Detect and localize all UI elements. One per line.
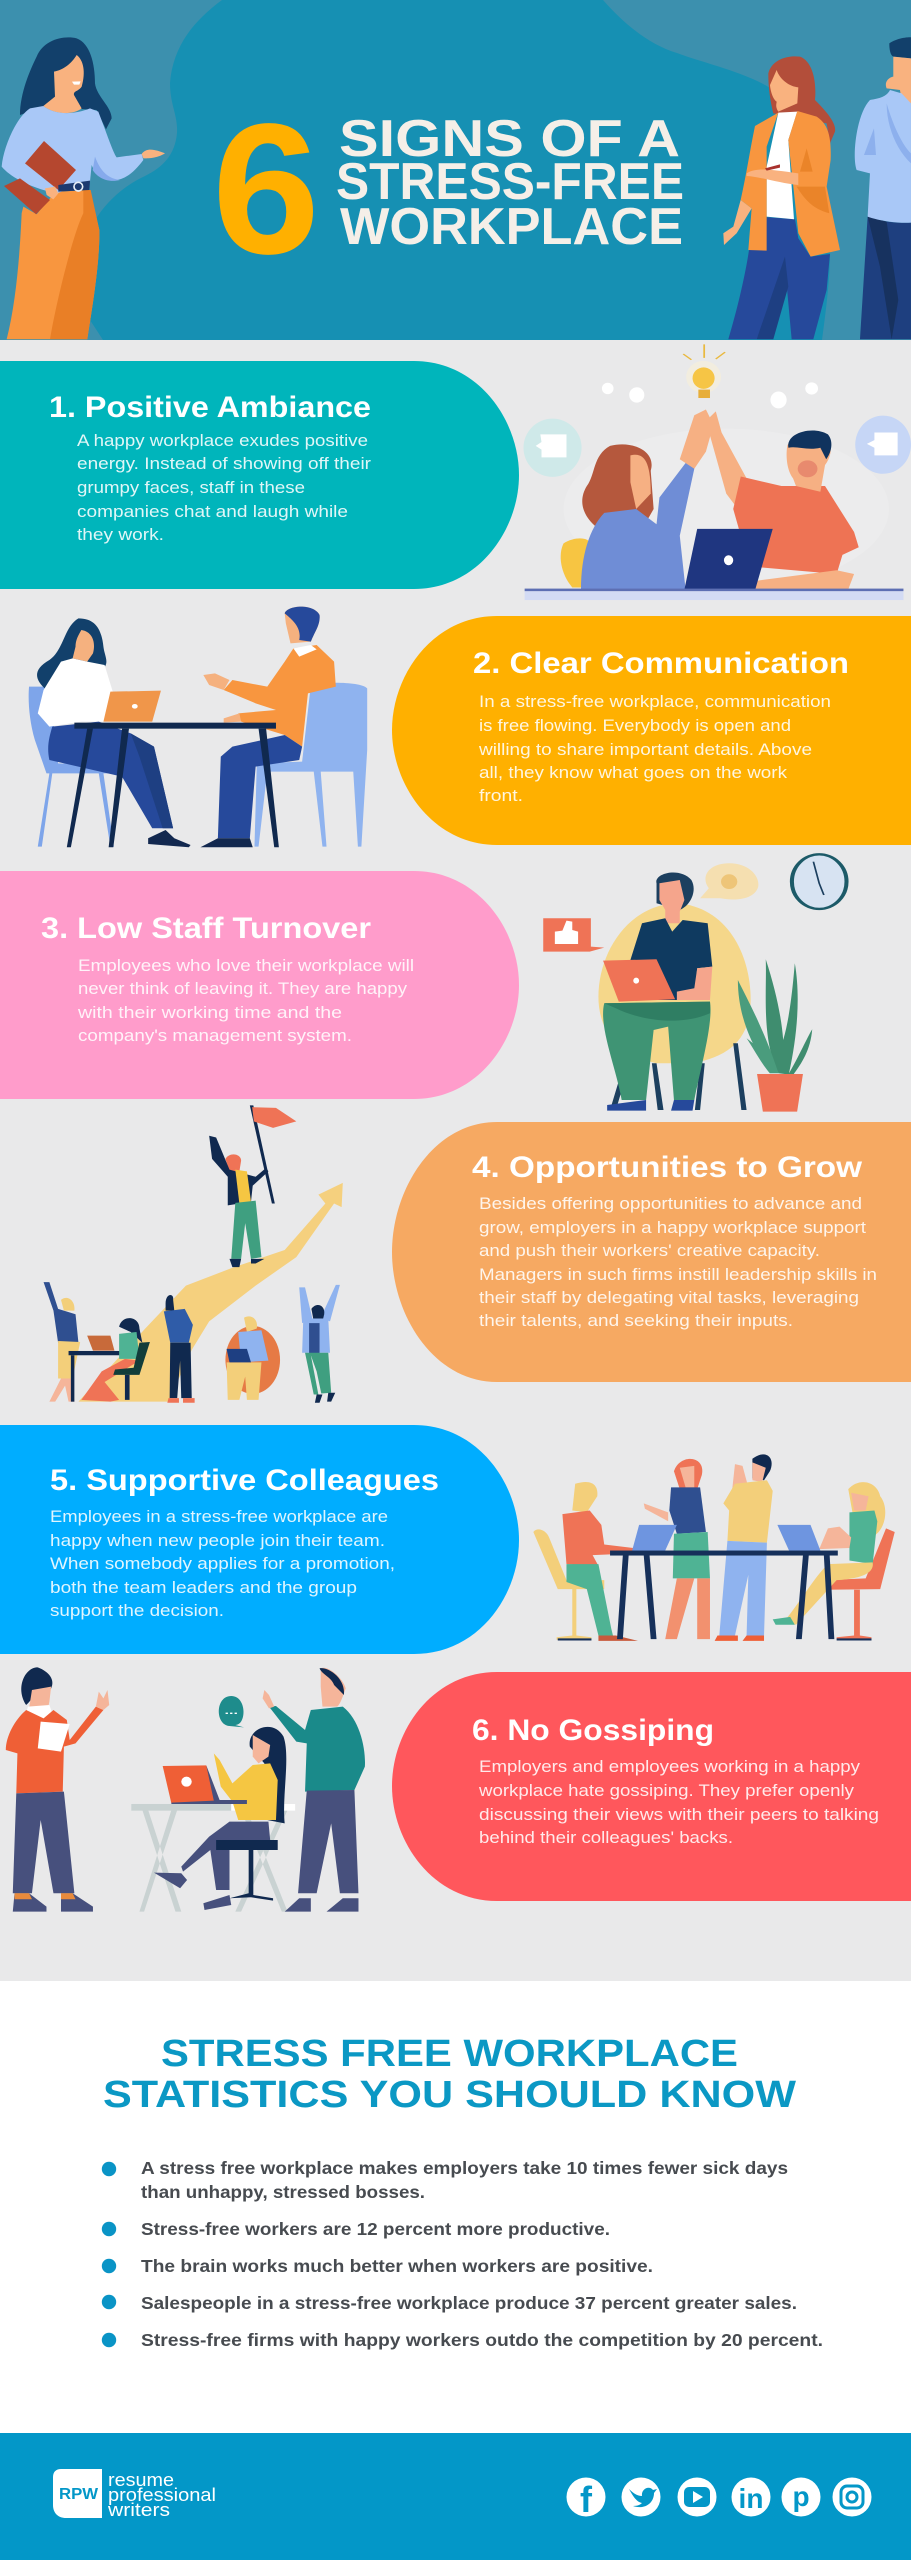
- body text 3: Employees who love their workplace will: [78, 956, 414, 975]
- body text 3: never think of leaving it. They are happy: [78, 979, 408, 998]
- icon: youtube: [678, 2478, 716, 2516]
- man in chair: [225, 1316, 280, 1400]
- desk and laptop: [69, 1336, 125, 1402]
- light dots: [602, 382, 818, 408]
- body text 6: workplace hate gossiping. They prefer openly: [478, 1781, 855, 1800]
- body text 1: grumpy faces, staff in these: [77, 478, 305, 497]
- body text 6: [478, 1757, 879, 1847]
- illustration: three coworkers talking: [6, 1667, 365, 1912]
- table: [67, 723, 279, 847]
- body text 3: company's management system.: [78, 1026, 352, 1045]
- puzzle bubble right: [855, 416, 911, 474]
- egg chair: [598, 903, 751, 1063]
- social icons: [566, 2478, 872, 2520]
- panel 5: supportive colleagues: [0, 1425, 519, 1654]
- statistics heading: STRESS FREE WORKPLACE: [161, 2033, 738, 2075]
- man seated left: [562, 1482, 638, 1641]
- body text 3: with their working time and the: [77, 1003, 342, 1022]
- title: signs of a stress-free workplace: [336, 110, 684, 256]
- heading 6: 6. No Gossiping: [472, 1714, 714, 1747]
- icon: facebook: [566, 2478, 606, 2520]
- lightbulb: [683, 344, 725, 398]
- laptop: [163, 1765, 247, 1804]
- left chair: [29, 687, 119, 847]
- standing man in teal: [263, 1668, 365, 1912]
- statistic 1: than unhappy, stressed bosses.: [141, 2182, 425, 2202]
- chair: [561, 538, 590, 587]
- logo: resume: [108, 2470, 174, 2490]
- growth arrow: [78, 1183, 343, 1402]
- body text 4: grow, employers in a happy workplace support: [479, 1218, 866, 1237]
- man: [603, 873, 712, 1111]
- body text 1: [77, 431, 371, 544]
- desk: [131, 1804, 295, 1912]
- statistic 1: A stress free workplace makes employers take 10 times fewer sick days: [141, 2158, 788, 2178]
- illustration: woman in orange jacket and man thinking: [723, 37, 911, 339]
- plant pot: [757, 1074, 803, 1112]
- thumbs up box: [543, 918, 604, 952]
- woman standing at desk: [44, 1282, 80, 1402]
- icon: linkedin: in: [739, 2483, 763, 2514]
- body text 2: [478, 692, 831, 805]
- cheering man: [299, 1285, 340, 1403]
- plant: [738, 959, 812, 1075]
- illustration: man on egg chair with laptop: [543, 854, 847, 1112]
- icon: linkedin: [732, 2478, 770, 2516]
- body text 4: and push their workers' creative capacity.: [479, 1241, 820, 1260]
- body text 4: Besides offering opportunities to advance and: [479, 1194, 862, 1213]
- right chair: [254, 683, 367, 847]
- wall clock: [792, 854, 847, 909]
- body text 2: is free flowing. Everybody is open and: [479, 716, 791, 735]
- chat bubble: ...: [224, 1706, 238, 1716]
- woman: [581, 409, 713, 589]
- body text 5: both the team leaders and the group: [50, 1578, 357, 1597]
- seated woman: [154, 1727, 286, 1910]
- statistics heading: STATISTICS YOU SHOULD KNOW: [103, 2074, 796, 2116]
- body text 3: [77, 956, 414, 1045]
- body text 5: [50, 1507, 395, 1620]
- laptops: [632, 1525, 820, 1551]
- logo: professional: [108, 2485, 216, 2505]
- illustration: four colleagues at a table: [533, 1454, 895, 1641]
- woman seated right: [773, 1482, 885, 1625]
- icon: pinterest: p: [792, 2481, 810, 2512]
- icon: pinterest: [782, 2478, 820, 2516]
- man: [706, 411, 859, 589]
- heading 1: 1. Positive Ambiance: [49, 391, 371, 424]
- chair legs: [610, 1043, 747, 1110]
- man: [200, 607, 336, 847]
- icon: facebook: f: [580, 2479, 593, 2520]
- body text 4: their talents, and seeking their inputs.: [479, 1311, 793, 1330]
- statistics heading: [103, 2033, 796, 2116]
- body text 2: all, they know what goes on the work: [479, 763, 788, 782]
- man with paper: [6, 1667, 109, 1912]
- header banner: [0, 0, 911, 340]
- laptop: [684, 529, 773, 589]
- body text 5: When somebody applies for a promotion,: [50, 1554, 395, 1573]
- body text 1: companies chat and laugh while: [77, 502, 348, 521]
- logo: RPW: [59, 2486, 99, 2503]
- body text 5: happy when new people join their team.: [50, 1531, 385, 1550]
- title: number 6: 6: [212, 86, 320, 293]
- left chair: [533, 1529, 604, 1640]
- table: [558, 1551, 871, 1640]
- standing man: [715, 1454, 773, 1641]
- standing man: [164, 1295, 195, 1403]
- panel 6: no gossiping: [392, 1672, 911, 1901]
- body text 4: Managers in such firms instill leadership skills in: [479, 1265, 877, 1284]
- statistic 2: Stress-free workers are 12 percent more productive.: [141, 2219, 610, 2239]
- woman: [37, 618, 191, 847]
- standing woman: [644, 1459, 710, 1639]
- title: signs of a stress-free workplace: STRESS-FREE: [336, 153, 684, 211]
- statistics list: [102, 2158, 823, 2350]
- puzzle bubble left: [523, 419, 582, 477]
- body text 4: their staff by delegating vital tasks, leveraging: [479, 1288, 859, 1307]
- panel 4: opportunities to grow: [392, 1122, 911, 1382]
- body text 1: they work.: [77, 525, 164, 544]
- heading 4: 4. Opportunities to Grow: [472, 1151, 863, 1184]
- icon: twitter: [622, 2478, 660, 2516]
- panel 1: positive ambiance: [0, 361, 519, 589]
- heading 5: 5. Supportive Colleagues: [50, 1464, 439, 1497]
- chat bubble: [219, 1696, 244, 1727]
- seated woman: [81, 1318, 150, 1402]
- logo: writers: [107, 2500, 170, 2520]
- statistic 4: Salespeople in a stress-free workplace produce 37 percent greater sales.: [141, 2293, 797, 2313]
- title: signs of a stress-free workplace: SIGNS OF A: [339, 110, 680, 168]
- body text 2: In a stress-free workplace, communication: [479, 692, 831, 711]
- body text 6: behind their colleagues' backs.: [479, 1828, 733, 1847]
- body text 5: Employees in a stress-free workplace are: [50, 1507, 388, 1526]
- right chair: [825, 1528, 895, 1640]
- flag: [250, 1105, 296, 1204]
- logo: [53, 2469, 216, 2520]
- body text 1: A happy workplace exudes positive: [77, 431, 368, 450]
- statistic 3: The brain works much better when workers are positive.: [141, 2256, 653, 2276]
- speech bubble: [700, 863, 758, 900]
- laptop: [103, 691, 161, 722]
- panel 2: clear communication: [392, 616, 911, 845]
- panel 3: low staff turnover: [0, 871, 519, 1099]
- body text 6: Employers and employees working in a happy: [479, 1757, 861, 1776]
- statistic 1: [102, 2158, 788, 2202]
- illustration: team climbing growth arrow: [44, 1105, 343, 1403]
- icon: instagram: [832, 2478, 872, 2516]
- body text 5: support the decision.: [50, 1601, 224, 1620]
- body text 1: energy. Instead of showing off their: [77, 454, 371, 473]
- illustration: two people at a table: [29, 607, 367, 847]
- illustration: high five: [523, 344, 911, 600]
- illustration: woman with clipboard: [2, 37, 165, 339]
- title: signs of a stress-free workplace: WORKPLACE: [340, 198, 683, 256]
- statistic 5: Stress-free firms with happy workers outdo the competition by 20 percent.: [141, 2330, 823, 2350]
- laptop: [603, 959, 675, 1002]
- statistics section background: [0, 1981, 911, 2433]
- person with flag: [209, 1136, 268, 1267]
- footer bar: [0, 2433, 911, 2560]
- body text 2: willing to share important details. Above: [478, 740, 812, 759]
- body text 4: [479, 1194, 877, 1330]
- heading 3: 3. Low Staff Turnover: [41, 912, 371, 945]
- heading 2: 2. Clear Communication: [473, 647, 849, 680]
- table: [525, 589, 903, 591]
- body text 6: discussing their views with their peers to talking: [479, 1805, 879, 1824]
- body text 2: front.: [479, 786, 523, 805]
